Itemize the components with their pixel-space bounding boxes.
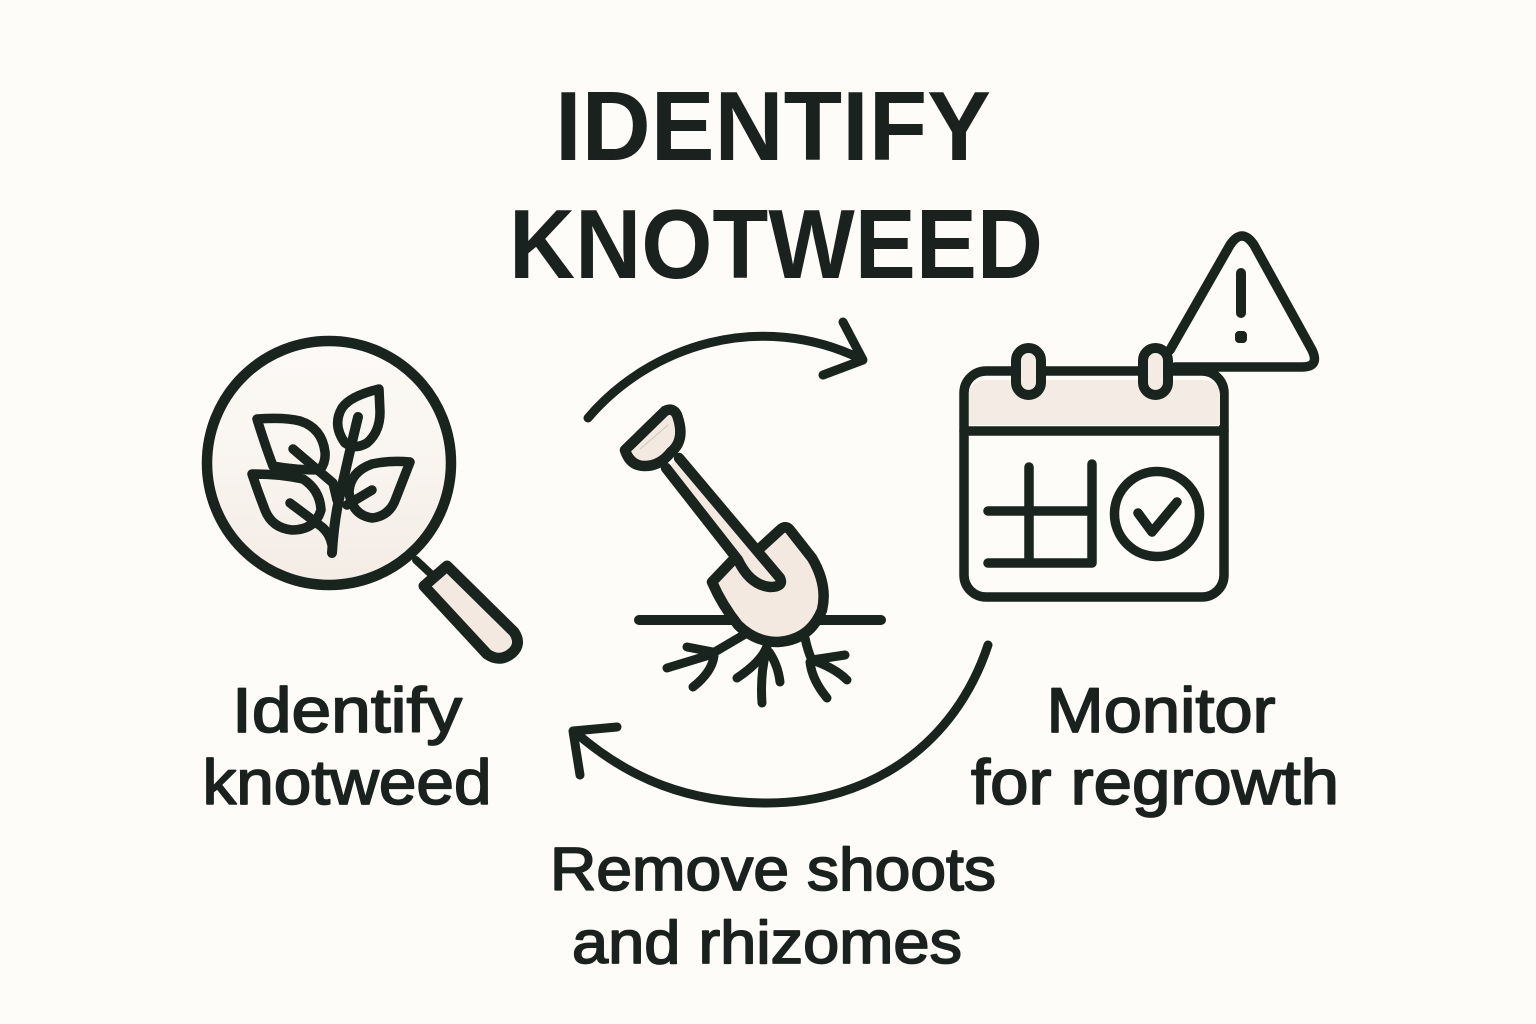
label: remove shoots and rhizomes [550,836,996,976]
label: monitor for regrowth: for regrowth [971,748,1339,818]
title: IDENTIFY [555,71,991,181]
ground line [639,615,881,625]
magnifier neck [416,560,431,574]
label: remove shoots and rhizomes: and rhizomes [572,909,962,976]
plant leaves [252,389,410,530]
label: identify knotweed [202,676,492,818]
plant stem and veins [290,417,372,553]
title: KNOTWEED [509,189,1043,299]
check badge [1114,472,1200,556]
label: remove shoots and rhizomes: Remove shoots [550,836,996,903]
label: monitor for regrowth: Monitor [1046,676,1276,746]
shovel blade [712,527,824,642]
magnifier handle [424,566,518,658]
icon: shovel with roots [625,410,881,703]
icon: warning triangle [1170,236,1314,367]
shovel grip [625,410,680,466]
arrow: bottom cycle arrow [573,645,988,803]
calendar grid [988,464,1092,563]
calendar header band [969,380,1220,425]
calendar rings [1016,348,1168,395]
roots [667,633,847,703]
shovel shaft [666,458,781,587]
calendar body [964,371,1224,597]
label: identify knotweed: knotweed [202,748,492,818]
arrow: top cycle arrow [588,322,863,418]
icon: magnifying glass with plant [207,341,518,658]
label: monitor for regrowth [971,676,1339,818]
title [509,71,1043,299]
icon: calendar [964,348,1224,597]
label: identify knotweed: Identify [232,676,463,746]
magnifier lens [207,341,451,585]
